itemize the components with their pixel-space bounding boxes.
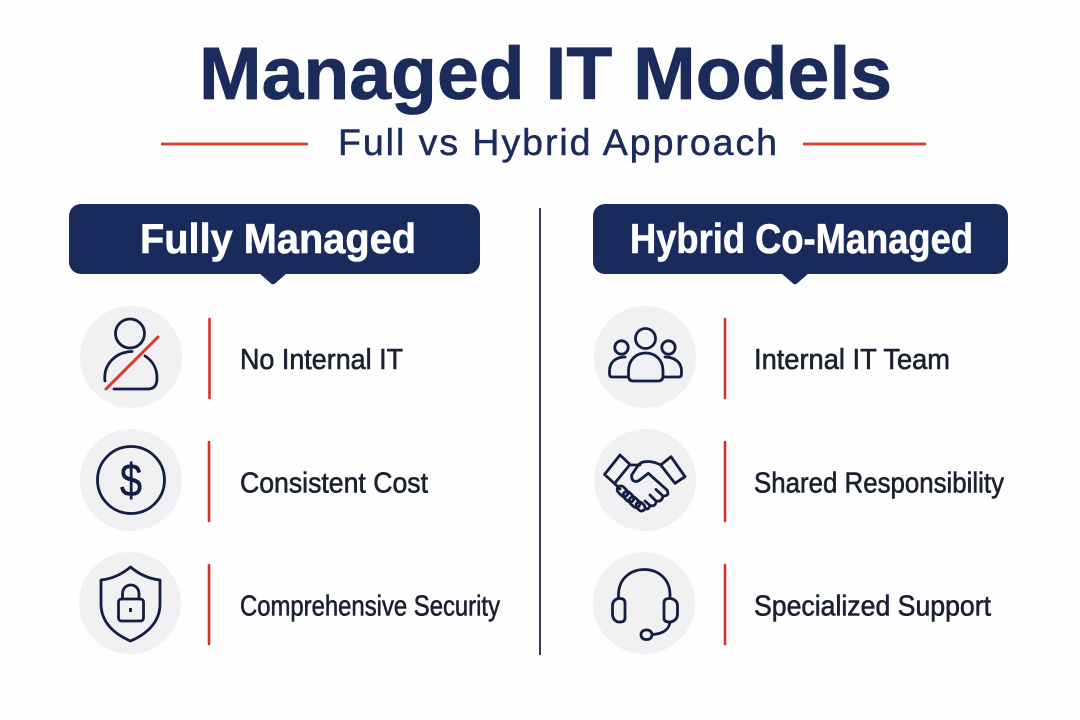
panel: fully managed <box>69 204 501 654</box>
icon: person crossed out <box>105 319 158 389</box>
icon: shield with lock <box>101 567 160 641</box>
subtitle: Full vs Hybrid Approach <box>338 121 777 163</box>
badge: hybrid co-managed: Hybrid Co-Managed <box>630 215 973 262</box>
badge: hybrid co-managed <box>593 204 1008 284</box>
row: specialized support <box>593 552 991 654</box>
row: no internal IT <box>80 306 403 408</box>
icon: team of three <box>610 328 682 381</box>
icon: handshake <box>604 455 685 513</box>
row: internal IT team: Internal IT Team <box>754 344 950 376</box>
row: shared responsibility: Shared Responsibility <box>754 468 1005 500</box>
row: consistent cost: Consistent Cost <box>240 468 428 500</box>
row: no internal IT: No Internal IT <box>240 344 403 376</box>
row: consistent cost <box>80 429 428 531</box>
row: comprehensive security <box>79 552 501 654</box>
row: comprehensive security: Comprehensive Security <box>240 590 501 622</box>
icon: dollar coin: $ <box>120 454 142 506</box>
icon: headset <box>612 570 678 640</box>
title: Managed IT Models <box>199 32 892 115</box>
row: shared responsibility <box>594 429 1005 531</box>
row: internal IT team <box>594 306 950 408</box>
panel: hybrid co-managed <box>593 204 1008 654</box>
badge: fully managed <box>69 204 480 284</box>
icon: dollar coin <box>98 446 164 514</box>
row: specialized support: Specialized Support <box>754 590 991 622</box>
badge: fully managed: Fully Managed <box>140 215 416 262</box>
